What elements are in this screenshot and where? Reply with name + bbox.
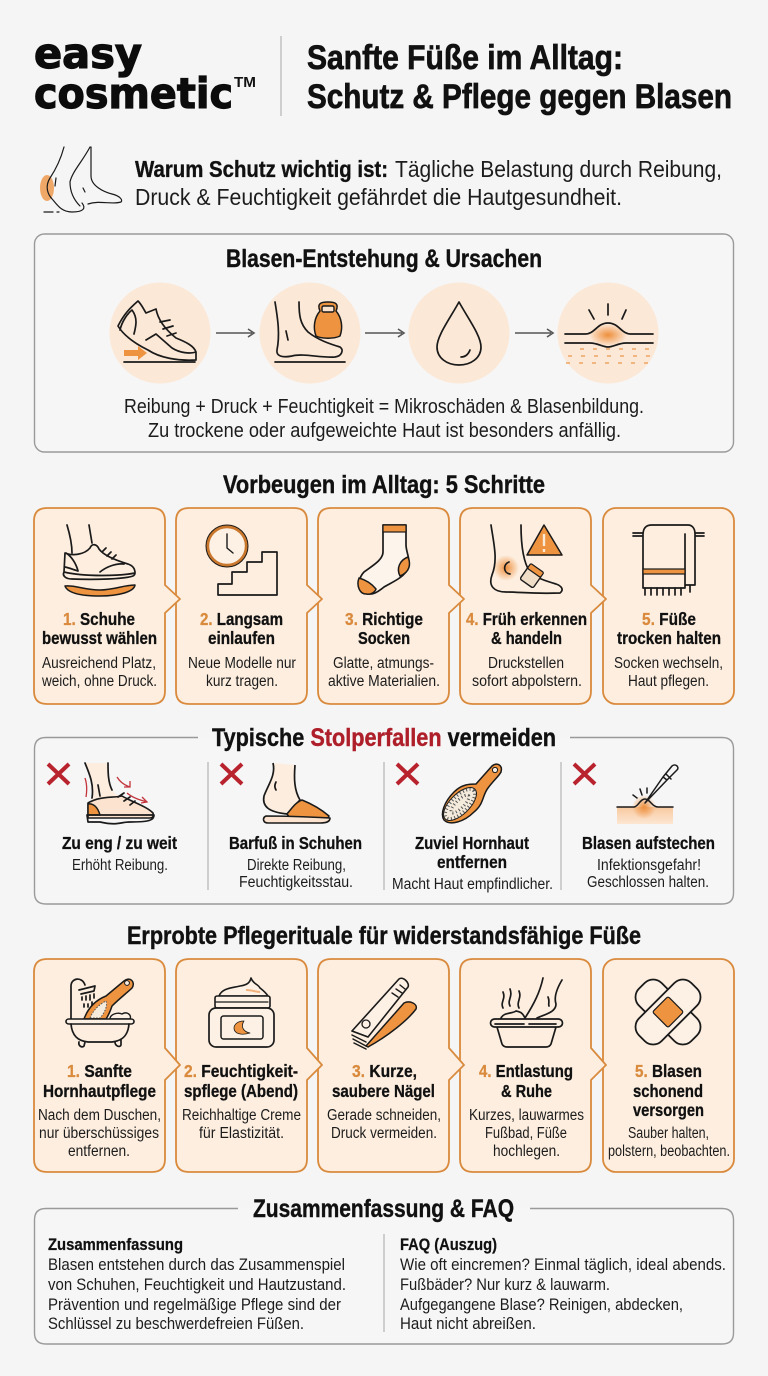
card 1: choose shoes: 1. Schuhe (63, 609, 135, 629)
card 4: detect early: 4. Früh erkennen (466, 609, 587, 629)
ritual 2: evening moisture care: 2. Feuchtigkeit- (184, 1061, 298, 1081)
icon: water drop (408, 282, 510, 384)
intro text: Warum Schutz wichtig ist: (135, 156, 388, 182)
pitfall 3: too much callus removal: Zuviel Hornhaut (415, 833, 529, 853)
ritual 5: blister care: polstern, beobachten. (608, 1143, 730, 1160)
heading: pitfalls: Typische Stolperfallen vermeiden (212, 724, 556, 752)
card 3: right socks (318, 508, 464, 704)
pitfall 4: piercing blisters: Geschlossen halten. (587, 874, 709, 891)
text: causes: Zu trockene oder aufgeweichte Haut ist besonders anfällig. (148, 420, 621, 442)
card 5: keep dry: 5. Füße (642, 609, 696, 629)
card 2: break in slowly: 2. Langsam (200, 609, 283, 629)
card 5: keep dry: Haut pflegen. (628, 673, 709, 690)
ritual 4: relief and rest: hochlegen. (493, 1143, 560, 1160)
pitfall 3: too much callus removal (392, 764, 553, 893)
ritual 4: relief and rest (460, 959, 606, 1172)
text: causes: Reibung + Druck + Feuchtigkeit = Mikroschäden & Blasenbildung. (124, 396, 644, 418)
text: summary: Schlüssel zu beschwerdefreien Füßen. (48, 1315, 304, 1333)
panel: summary and FAQ (34, 1195, 734, 1344)
heading: prevention: Vorbeugen im Alltag: 5 Schritte (223, 471, 545, 499)
text: FAQ: Fußbäder? Nur kurz & lauwarm. (400, 1276, 610, 1294)
arrow (216, 329, 254, 337)
pitfall 2: barefoot in shoes (221, 763, 362, 891)
card 1: choose shoes: Ausreichend Platz, (42, 655, 156, 672)
card 5: keep dry (603, 508, 734, 704)
card 3: right socks: Glatte, atmungs- (333, 655, 434, 672)
ritual 2: evening moisture care: für Elastizität. (199, 1125, 284, 1142)
text: FAQ: Wie oft eincremen? Einmal täglich, ideal abends. (400, 1256, 726, 1274)
icon: shoe friction (110, 282, 210, 384)
heading: causes: Blasen-Entstehung & Ursachen (226, 245, 542, 273)
header (34, 29, 732, 118)
card 5: keep dry: trocken halten (617, 628, 721, 648)
text: FAQ: FAQ (Auszug) (400, 1236, 497, 1254)
arrow (365, 329, 404, 337)
card 2: break in slowly: kurz tragen. (206, 673, 278, 690)
ritual 1: gentle callus care: Nach dem Duschen, (38, 1107, 161, 1124)
ritual 4: relief and rest: Kurzes, lauwarmes (469, 1107, 584, 1124)
card 4: detect early: sofort abpolstern. (472, 673, 582, 690)
ritual 3: short clean nails: 3. Kurze, (352, 1061, 417, 1081)
panel: prevention steps (34, 508, 734, 704)
text: summary: Prävention und regelmäßige Pflege sind der (48, 1296, 341, 1314)
card 4: detect early: Druckstellen (488, 655, 564, 672)
logo: easy cosmetic: TM (234, 74, 256, 91)
ritual 1: gentle callus care (34, 959, 180, 1172)
card 2: break in slowly: einlaufen (208, 628, 275, 648)
icon: foot with kettlebell (260, 282, 360, 384)
ritual 3: short clean nails (318, 959, 464, 1172)
ritual 1: gentle callus care: nur überschüssiges (39, 1125, 159, 1142)
ritual 2: evening moisture care: spflege (Abend) (184, 1081, 298, 1101)
ritual 4: relief and rest: & Ruhe (501, 1081, 552, 1101)
card 5: keep dry: Socken wechseln, (614, 655, 723, 672)
text: summary: Blasen entstehen durch das Zusammenspiel (48, 1256, 345, 1274)
logo: easy cosmetic: easy (34, 29, 142, 78)
card 2: break in slowly (176, 508, 322, 704)
card 3: right socks: 3. Richtige (345, 609, 423, 629)
text: summary: Zusammenfassung (48, 1236, 183, 1254)
pitfall 1: too tight or too wide (48, 763, 177, 874)
card 4: detect early (460, 508, 606, 704)
card 3: right socks: aktive Materialien. (328, 673, 440, 690)
pitfall 1: too tight or too wide: Erhöht Reibung. (72, 857, 168, 874)
ritual 4: relief and rest: Fußbad, Füße (485, 1125, 567, 1142)
card 1: choose shoes (34, 508, 180, 704)
ritual 1: gentle callus care: entfernen. (68, 1143, 130, 1160)
intro text: Tägliche Belastung durch Reibung, (395, 156, 722, 182)
panel: care rituals (34, 959, 734, 1172)
ritual 5: blister care (603, 959, 734, 1172)
intro text: Druck & Feuchtigkeit gefährdet die Hautgesundheit. (135, 184, 622, 210)
icon: blister (558, 282, 658, 384)
ritual 1: gentle callus care: 1. Sanfte (67, 1061, 132, 1081)
ritual 5: blister care: 5. Blasen (635, 1061, 702, 1081)
intro text (135, 156, 722, 210)
pitfall 1: too tight or too wide: Zu eng / zu weit (62, 833, 177, 853)
ritual 3: short clean nails: Gerade schneiden, (327, 1107, 441, 1124)
title: Sanfte Füße im Alltag: (307, 39, 623, 77)
card 2: break in slowly: Neue Modelle nur (188, 655, 296, 672)
pitfall 4: piercing blisters: Blasen aufstechen (582, 833, 715, 853)
panel: causes (34, 234, 734, 452)
ritual 4: relief and rest: 4. Entlastung (479, 1061, 573, 1081)
title (307, 39, 732, 116)
text: summary (48, 1236, 346, 1333)
ritual 3: short clean nails: saubere Nägel (332, 1081, 435, 1101)
card 1: choose shoes: weich, ohne Druck. (41, 673, 157, 690)
heading: summary and FAQ: Zusammenfassung & FAQ (253, 1195, 514, 1223)
logo: easy cosmetic: cosmetic (34, 69, 233, 118)
ritual 5: blister care: versorgen (633, 1100, 704, 1120)
text: FAQ (400, 1236, 726, 1333)
panel: pitfalls (34, 724, 734, 904)
pitfall 2: barefoot in shoes: Barfuß in Schuhen (229, 833, 362, 853)
icon: feet with heel highlight (40, 147, 122, 212)
ritual 1: gentle callus care: Hornhautpflege (43, 1081, 156, 1101)
pitfall 2: barefoot in shoes: Direkte Reibung, (247, 857, 346, 874)
ritual 3: short clean nails: Druck vermeiden. (331, 1125, 437, 1142)
card 3: right socks: Socken (358, 628, 410, 648)
pitfall 4: piercing blisters (574, 764, 715, 891)
text: FAQ: Haut nicht abreißen. (400, 1315, 536, 1333)
pitfall 3: too much callus removal: entfernen (437, 852, 507, 872)
arrow (515, 329, 553, 337)
logo: easy cosmetic (34, 29, 256, 118)
text: FAQ: Aufgegangene Blase? Reinigen, abdecken, (400, 1296, 683, 1314)
pitfall 3: too much callus removal: Macht Haut empfindlicher. (392, 876, 553, 893)
ritual 2: evening moisture care (176, 959, 322, 1172)
ritual 5: blister care: Sauber halten, (628, 1125, 709, 1142)
card 4: detect early: & handeln (491, 628, 562, 648)
text: causes (124, 396, 644, 442)
pitfall 2: barefoot in shoes: Feuchtigkeitsstau. (239, 874, 353, 891)
ritual 2: evening moisture care: Reichhaltige Creme (182, 1107, 301, 1124)
heading: care rituals: Erprobte Pflegerituale für widerstandsfähige Füße (127, 922, 641, 950)
pitfall 4: piercing blisters: Infektionsgefahr! (597, 857, 701, 874)
text: summary: von Schuhen, Feuchtigkeit und Hautzustand. (48, 1276, 346, 1294)
ritual 5: blister care: schonend (633, 1081, 703, 1101)
card 1: choose shoes: bewusst wählen (42, 628, 157, 648)
